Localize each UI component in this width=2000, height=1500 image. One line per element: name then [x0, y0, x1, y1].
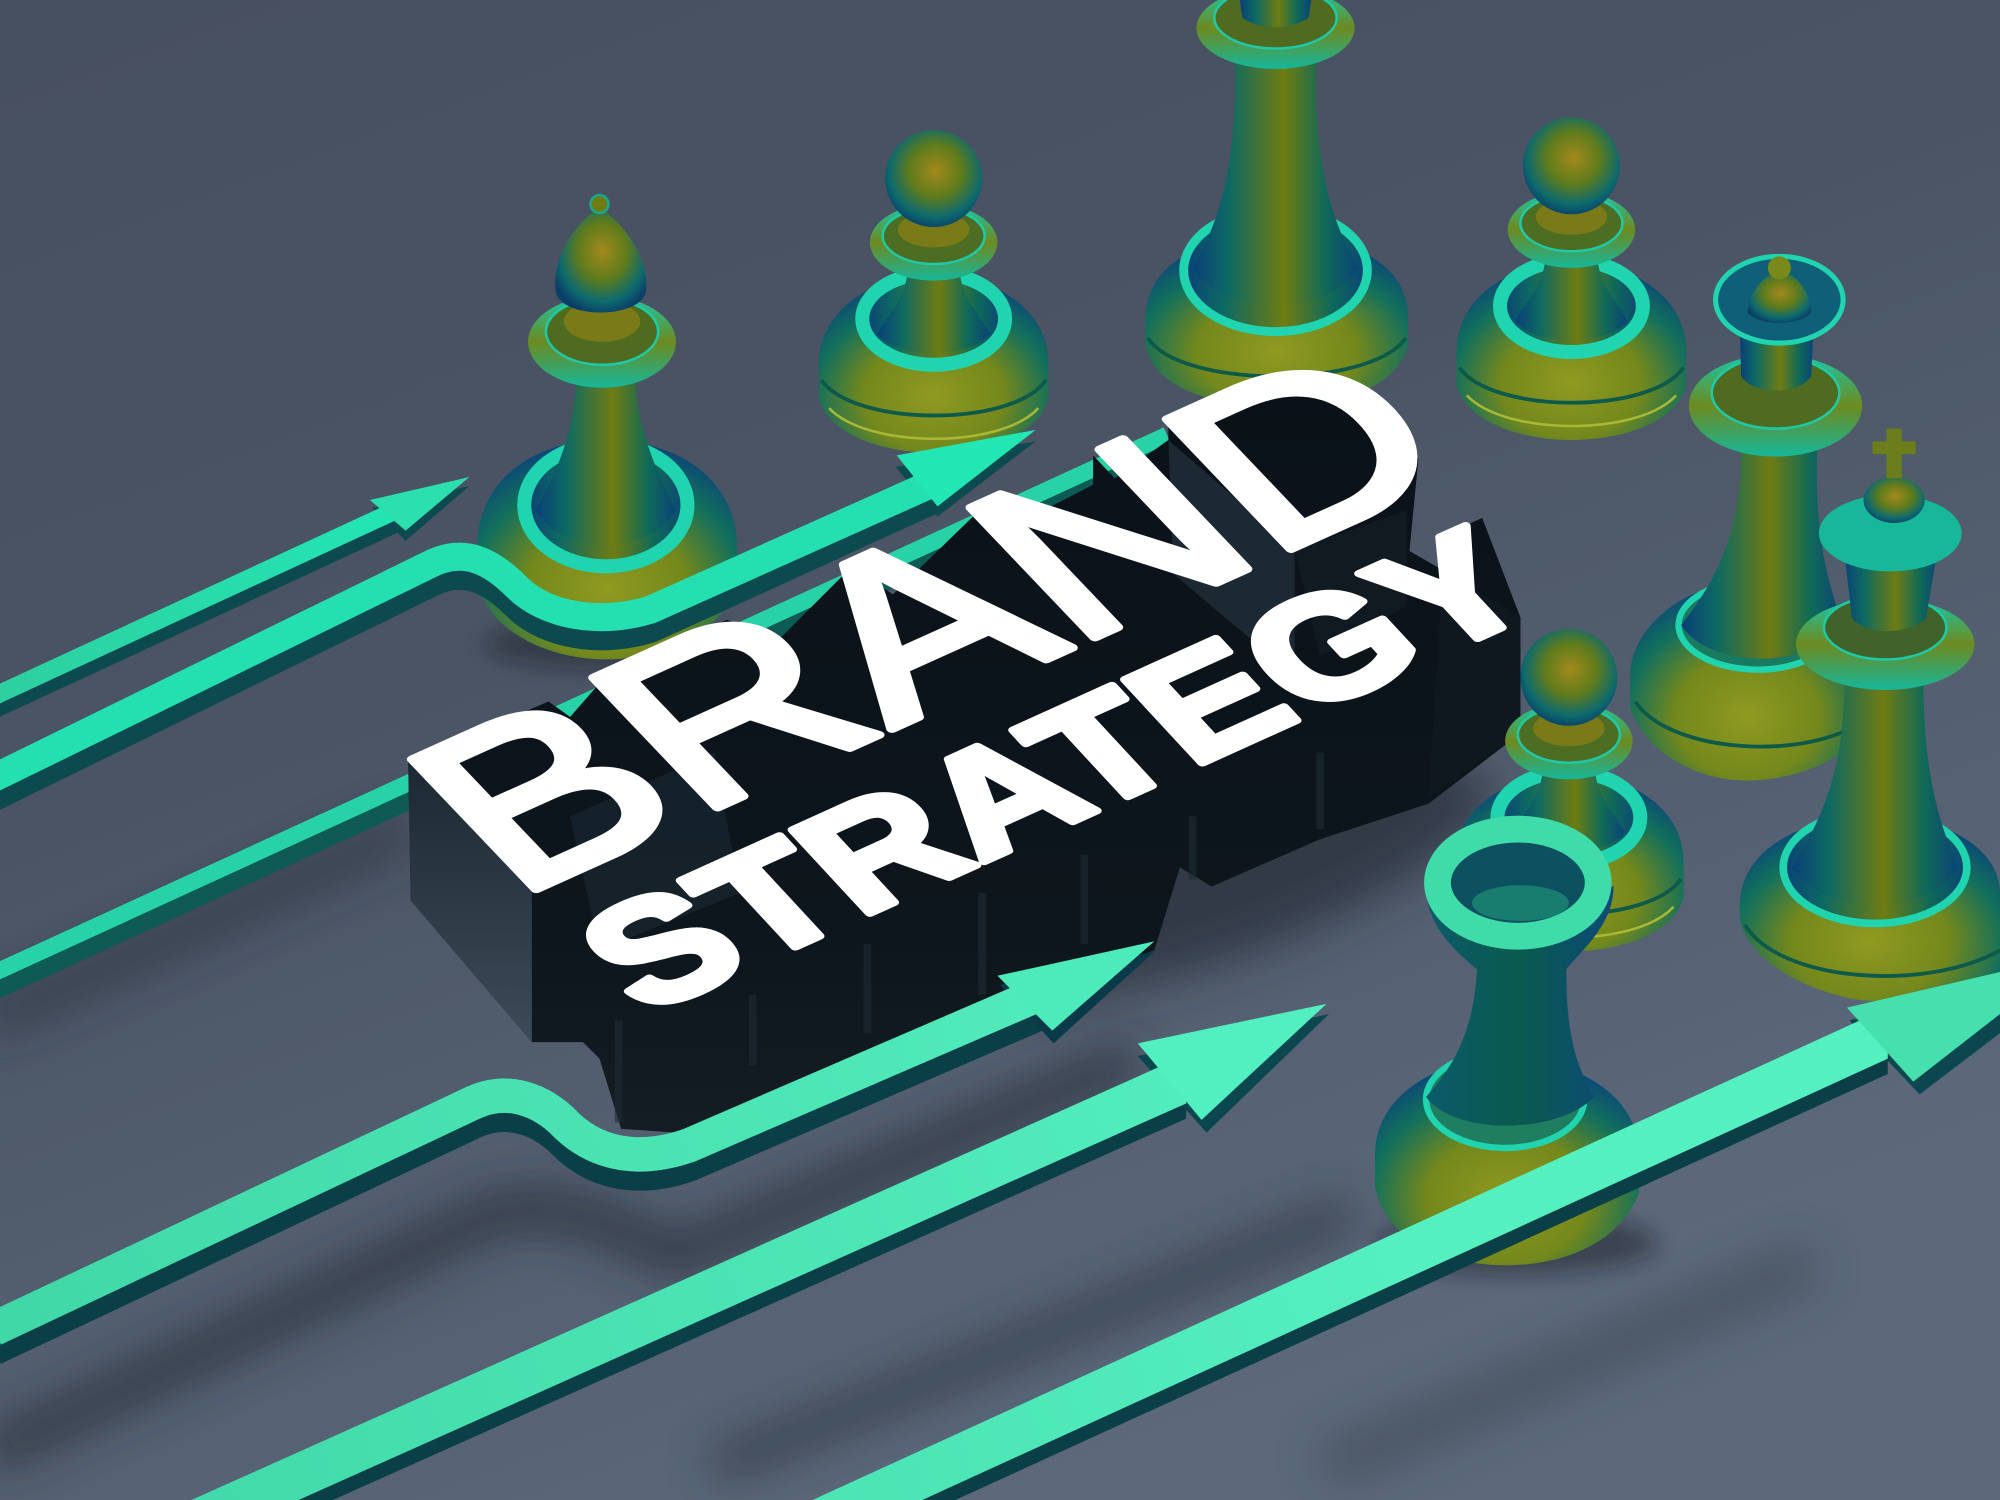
chess piece: king	[1740, 429, 2000, 1001]
heading: STRATEGY: STRATEGY	[543, 499, 1570, 1042]
chess piece: bishop	[477, 195, 740, 670]
chess piece: queen right	[1630, 256, 1865, 781]
chess piece: pawn back right	[1457, 117, 1686, 440]
arrow: curving over the bishop	[0, 430, 1036, 796]
lettering block: extrusion	[408, 370, 1520, 1133]
chess piece: pawn front	[1454, 629, 1684, 952]
chess piece: rook	[1375, 829, 1658, 1276]
arrow: top thin	[0, 477, 469, 710]
chess piece: pawn back left	[819, 130, 1048, 453]
heading: BRAND: BRAND	[352, 301, 1504, 940]
arrow: behind the lettering	[0, 435, 1167, 990]
arrow: straight lower	[191, 1004, 1329, 1500]
arrow: curved lower	[0, 941, 1154, 1348]
chess piece: queen back centre	[1145, 0, 1408, 406]
arrow: bottom right	[812, 972, 2000, 1500]
